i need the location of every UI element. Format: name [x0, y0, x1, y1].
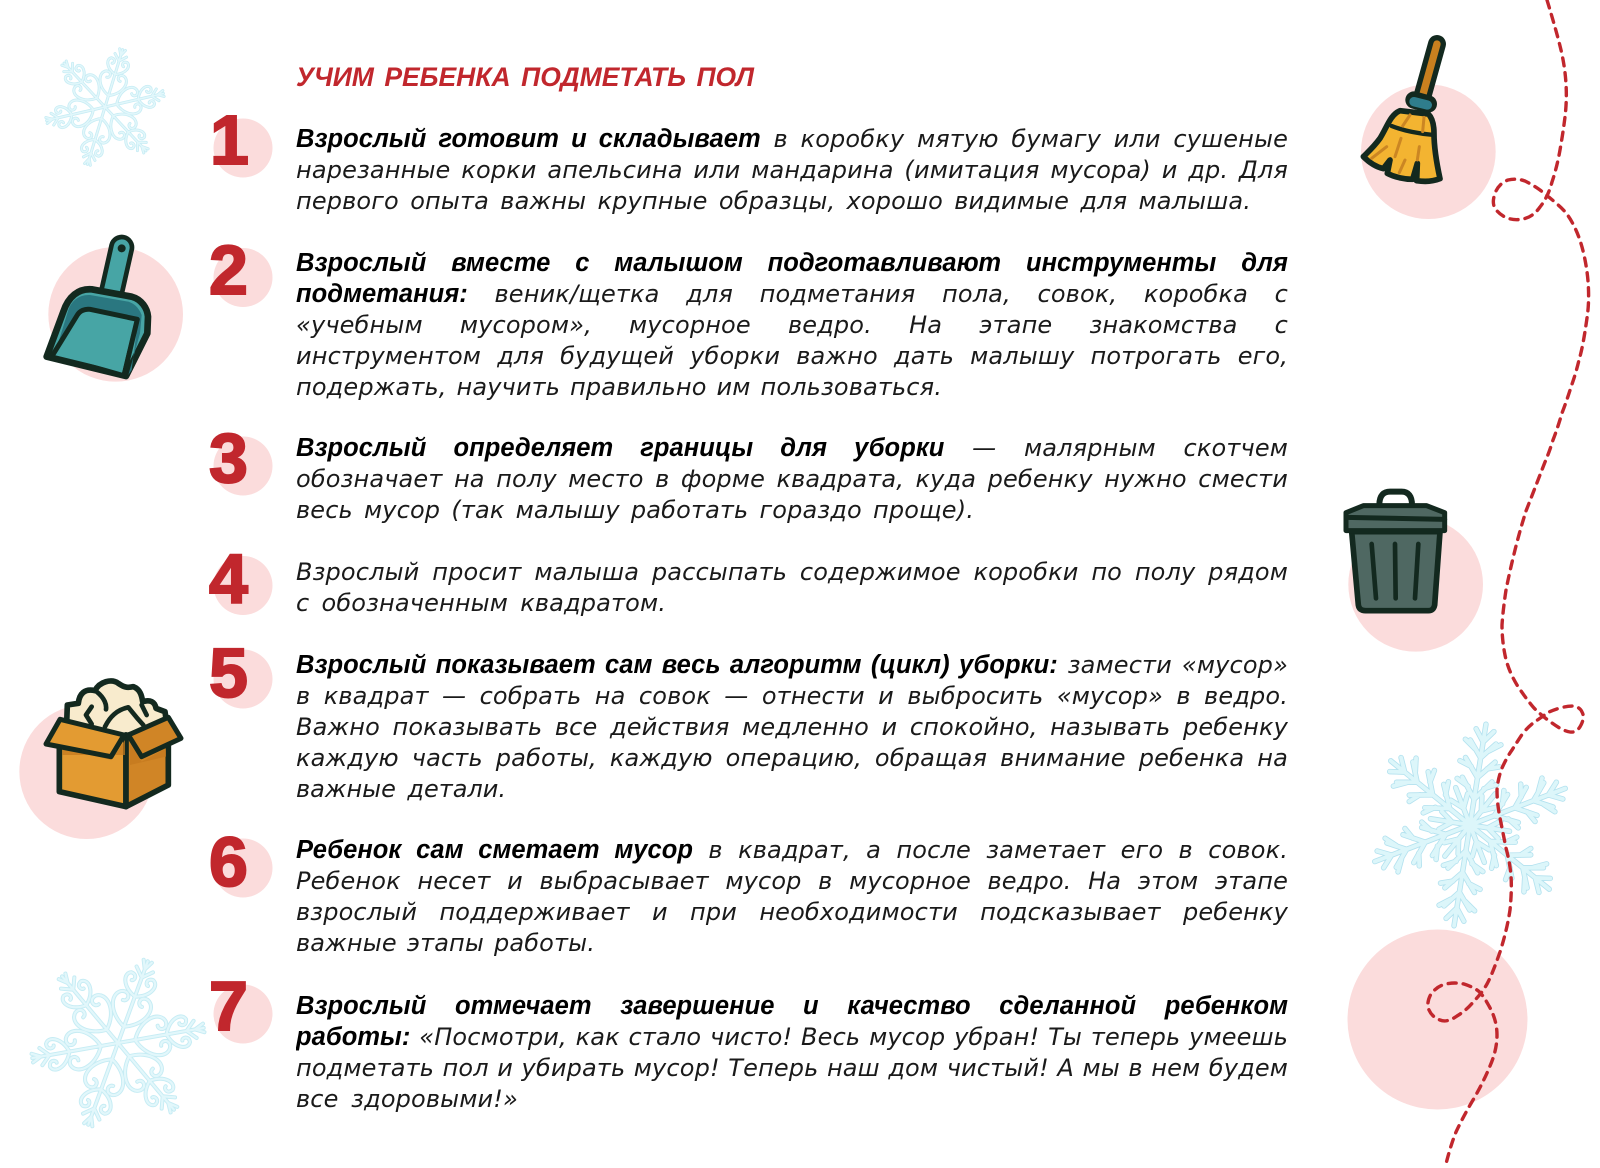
- step 2 text: «учебным мусором», мусорное ведро. На этапе знакомства с: [296, 311, 1288, 339]
- snowflake right: [1340, 697, 1600, 953]
- step 3 text: Взрослый определяет границы для уборки — малярным скотчем: [296, 434, 1288, 462]
- number badge 3: 3: [209, 419, 248, 497]
- number badge 6: 6: [209, 823, 248, 901]
- step 2 text: Взрослый вместе с малышом подготавливают инструменты для: [296, 248, 1288, 276]
- icon: dustpan: [47, 244, 183, 382]
- number badge 5: [209, 634, 272, 712]
- step 5 text: важные детали.: [296, 775, 506, 803]
- step 4 text: с обозначенным квадратом.: [296, 589, 666, 617]
- number badge 2: [209, 231, 272, 309]
- step 4 text: [296, 558, 1288, 617]
- step 5 text: [296, 651, 1288, 803]
- step 4 text: Взрослый просит малыша рассыпать содержимое коробки по полу рядом: [296, 558, 1288, 586]
- step 1 text: [296, 125, 1288, 215]
- dashed red string: [1428, 0, 1589, 1168]
- step 7 text: [296, 992, 1288, 1113]
- number badge 5: 5: [209, 634, 248, 712]
- number badge 4: 4: [209, 540, 248, 618]
- number badge 6: [209, 823, 272, 901]
- pink circle bottom right: [1348, 930, 1528, 1110]
- title: УЧИМ РЕБЕНКА ПОДМЕТАТЬ ПОЛ: [296, 62, 754, 92]
- step 7 text: работы: «Посмотри, как стало чисто! Весь мусор убран! Ты теперь умеешь: [296, 1023, 1288, 1051]
- step 6 text: [296, 836, 1288, 957]
- step 3 text: [296, 434, 1288, 524]
- number badge 1: [210, 101, 272, 179]
- snowflake top left: [33, 36, 177, 178]
- number badge 2: 2: [209, 231, 248, 309]
- number badge 3: [209, 419, 272, 497]
- step 2 text: подержать, научить правильно им пользоваться.: [296, 373, 942, 401]
- step 1 text: нарезанные корки апельсина или мандарина (имитация мусора) и др. Для: [296, 156, 1288, 184]
- snowflake bottom left: [18, 944, 218, 1142]
- number badge 4: [209, 540, 272, 618]
- icon: trash can: [1346, 492, 1483, 652]
- number badge 7: [209, 967, 272, 1045]
- step 2 text: подметания: веник/щетка для подметания пола, совок, коробка с: [296, 280, 1288, 308]
- step 5 text: в квадрат — собрать на совок — отнести и выбросить «мусор» в ведро.: [296, 682, 1288, 710]
- icon: broom: [1361, 44, 1496, 219]
- step 2 text: инструментом для будущей уборки важно дать малышу потрогать его,: [296, 342, 1288, 370]
- step 1 text: первого опыта важны крупные образцы, хорошо видимые для малыша.: [296, 187, 1251, 215]
- number badge 7: 7: [209, 967, 248, 1045]
- step 2 text: [296, 248, 1288, 401]
- icon: box with paper: [19, 681, 181, 839]
- step 6 text: Ребенок сам сметает мусор в квадрат, а после заметает его в совок.: [296, 836, 1288, 864]
- number badge 1: 1: [210, 101, 249, 179]
- step 6 text: важные этапы работы.: [296, 929, 595, 957]
- step 3 text: обозначает на полу место в форме квадрата, куда ребенку нужно смести: [296, 465, 1288, 493]
- step 6 text: Ребенок несет и выбрасывает мусор в мусорное ведро. На этом этапе: [296, 867, 1288, 895]
- step 5 text: Важно показывать все действия медленно и спокойно, называть ребенку: [296, 713, 1288, 741]
- step 3 text: весь мусор (так малышу работать гораздо проще).: [296, 496, 974, 524]
- step 7 text: все здоровыми!»: [296, 1085, 518, 1113]
- step 7 text: Взрослый отмечает завершение и качество сделанной ребенком: [296, 992, 1288, 1020]
- step 1 text: Взрослый готовит и складывает в коробку мятую бумагу или сушеные: [296, 125, 1288, 153]
- step 5 text: каждую часть работы, каждую операцию, обращая внимание ребенка на: [296, 744, 1288, 772]
- step 7 text: подметать пол и убирать мусор! Теперь наш дом чистый! А мы в нем будем: [296, 1054, 1288, 1082]
- step 6 text: взрослый поддерживает и при необходимости подсказывает ребенку: [296, 898, 1288, 926]
- step 5 text: Взрослый показывает сам весь алгоритм (цикл) уборки: замести «мусор»: [296, 651, 1288, 679]
